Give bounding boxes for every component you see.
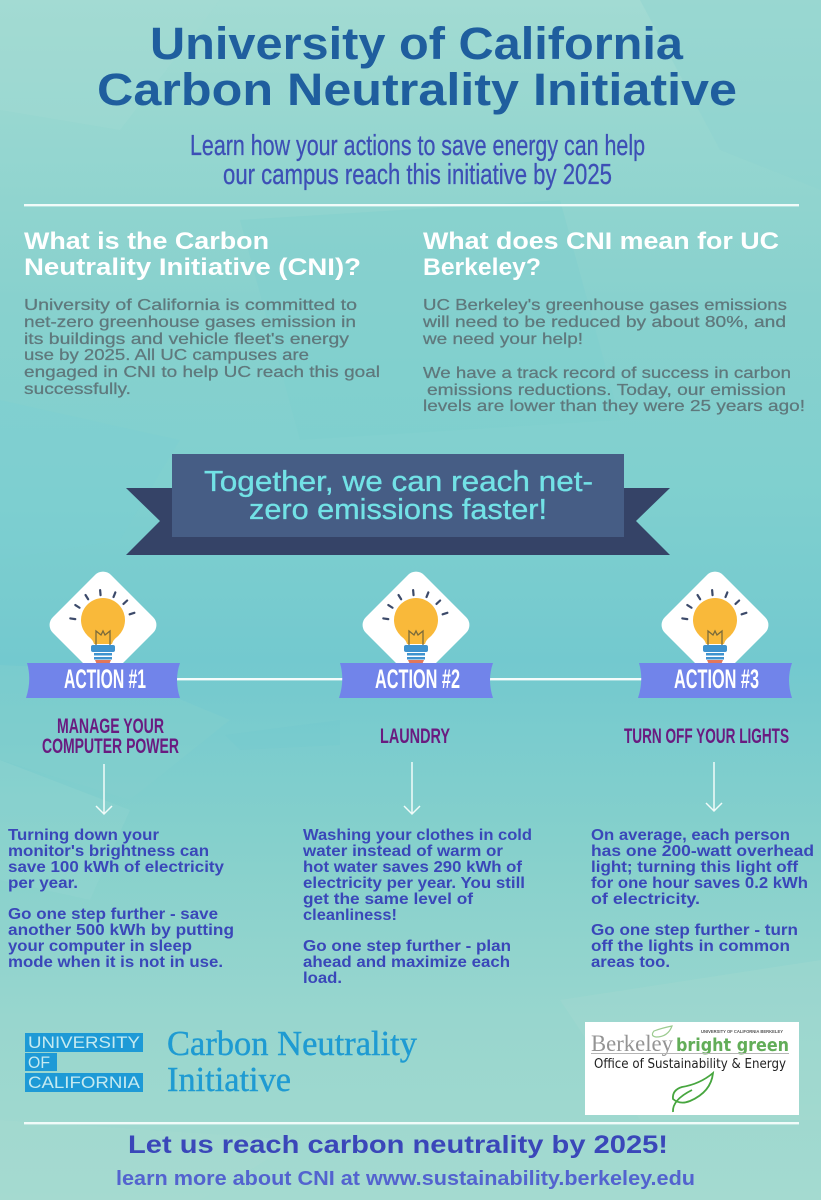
heading: laundry: LAUNDRY [380, 725, 450, 748]
text block: action 2: hot water saves 290 kWh of [303, 859, 523, 876]
text block: action 2 [302, 827, 532, 987]
logo: University of California: UNIVERSITY [28, 1033, 140, 1052]
logo: Carbon Neutrality Initiative: Initiative [167, 1060, 291, 1099]
text block: action 1 [8, 827, 234, 971]
text block: what CNI means: UC Berkeley's greenhouse gases emissions [423, 297, 787, 314]
label: action 1 [26, 663, 180, 698]
text block: action 3: off the lights in common [591, 938, 790, 955]
logo: Berkeley bright green: Office of Sustainability & Energy [594, 1057, 786, 1072]
text block: action 3: has one 200-watt overhead [591, 843, 814, 860]
text block: what CNI means: levels are lower than they were 25 years ago! [423, 398, 805, 415]
text block: action 3: light; turning this light off [591, 859, 799, 876]
text block: what CNI means: we need your help! [422, 331, 583, 348]
text block: action 2: Washing your clothes in cold [303, 827, 532, 844]
logo: Berkeley bright green: bright green [676, 1035, 789, 1056]
logo: Berkeley bright green: UNIVERSITY OF CALIFORNIA BERKELEY [701, 1029, 783, 1034]
text block: action 1: monitor's brightness can [8, 843, 209, 860]
text block: what is CNI: its buildings and vehicle fleet's energy [24, 331, 349, 348]
logo: University of California [25, 1033, 143, 1092]
label: action 2 [339, 663, 493, 698]
text block: action 2: water instead of warm or [302, 843, 503, 860]
text block: action 1: save 100 kWh of electricity [8, 859, 224, 876]
icon: light bulb 2 [358, 567, 474, 683]
text block: action 2: ahead and maximize each [303, 954, 510, 971]
panel: what is CNI [24, 228, 380, 398]
text block: action 1: mode when it is not in use. [8, 954, 223, 971]
logo: Carbon Neutrality Initiative [167, 1024, 417, 1099]
text block: action 2: cleanliness! [303, 907, 397, 924]
banner: Together, we can reach net- [204, 466, 593, 498]
text block: action 3: On average, each person [591, 827, 790, 844]
text block: action 1: Turning down your [8, 827, 159, 844]
banner: zero emissions faster! [249, 494, 547, 526]
title [97, 18, 737, 115]
text block: what CNI means: will need to be reduced by about 80%, and [422, 314, 786, 331]
logo: Berkeley bright green: Berkeley [591, 1031, 673, 1056]
text block: what CNI means: emissions reductions. Today, our emission [427, 382, 786, 399]
text block: what is CNI: successfully. [24, 381, 131, 398]
text block: what is CNI: use by 2025. All UC campuses are [24, 347, 309, 364]
heading: what is CNI: What is the Carbon [24, 228, 269, 255]
heading: what is CNI: Neutrality Initiative (CNI)? [24, 254, 361, 281]
text block: action 1: Go one step further - save [8, 906, 218, 923]
text block: action 2: get the same level of [303, 891, 474, 908]
heading: what is CNI [24, 228, 361, 281]
heading: manage your computer power [42, 715, 179, 758]
label: action 3: ACTION #3 [674, 664, 759, 694]
label: action 3 [638, 663, 792, 698]
logo: Berkeley bright green [585, 1022, 799, 1115]
text block: action 3: Go one step further - turn [591, 922, 798, 939]
icon: light bulb 1 [45, 567, 161, 683]
heading: what CNI means: What does CNI mean for UC [423, 228, 779, 255]
text block: what is CNI: engaged in CNI to help UC reach this goal [24, 364, 380, 381]
text block: action 2: Go one step further - plan [303, 938, 511, 955]
text block: action 2: load. [303, 970, 342, 987]
text block: action 2: electricity per year. You still [303, 875, 525, 892]
icon: light bulb 3 [657, 567, 773, 683]
logo: University of California: OF [28, 1053, 50, 1072]
logo: Carbon Neutrality Initiative: Carbon Neutrality [167, 1024, 417, 1063]
subtitle [190, 130, 645, 191]
arrow 1 [96, 764, 112, 814]
text block: action 3: of electricity. [591, 891, 700, 908]
title: Carbon Neutrality Initiative [97, 64, 737, 115]
text block: action 1: your computer in sleep [8, 938, 192, 955]
heading: what CNI means: Berkeley? [423, 254, 541, 281]
heading: manage your computer power: MANAGE YOUR [57, 715, 164, 738]
panel: what CNI means for UC Berkeley [422, 228, 805, 415]
connector lines [174, 678, 645, 680]
text block: action 1: per year. [8, 875, 78, 892]
arrow 2 [404, 762, 420, 814]
heading: manage your computer power: COMPUTER POWER [42, 735, 179, 758]
title: University of California [150, 18, 684, 69]
subtitle: our campus reach this initiative by 2025 [223, 159, 612, 191]
footer heading: Let us reach carbon neutrality by 2025! [128, 1131, 668, 1159]
text block: action 3 [591, 827, 814, 971]
label: action 1: ACTION #1 [64, 664, 146, 694]
logo: University of California: CALIFORNIA [28, 1073, 141, 1092]
text block: action 3: for one hour saves 0.2 kWh [591, 875, 808, 892]
text block: action 3: areas too. [591, 954, 670, 971]
heading: what CNI means [423, 228, 779, 281]
banner [126, 454, 670, 555]
footer link: learn more about CNI at www.sustainability.berkeley.edu [116, 1168, 695, 1190]
subtitle: Learn how your actions to save energy can help [190, 130, 645, 162]
text block: what is CNI: University of California is committed to [24, 297, 357, 314]
text block: what is CNI: net-zero greenhouse gases emission in [24, 314, 356, 331]
text block: what CNI means: We have a track record of success in carbon [423, 365, 791, 382]
text block: what is CNI [24, 297, 380, 398]
label: action 2: ACTION #2 [375, 664, 460, 694]
text block: what CNI means [422, 297, 805, 415]
text block: action 1: another 500 kWh by putting [8, 922, 234, 939]
arrow 3 [706, 762, 722, 811]
